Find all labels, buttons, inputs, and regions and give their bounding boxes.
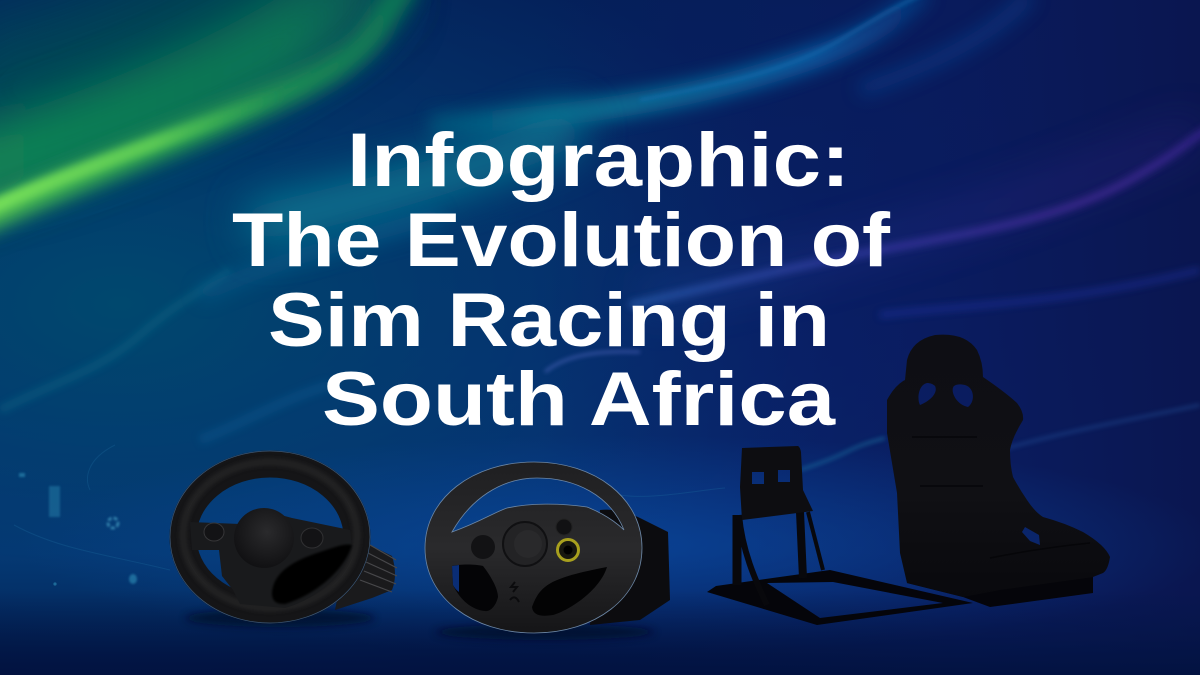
wheel one rim [183,464,357,610]
wheel one hub [234,508,294,568]
wheel two centre [503,522,547,566]
title: The Evolution of [232,198,891,283]
title: South Africa [322,357,836,442]
decorative HUD marks [19,473,137,586]
rig uprights [737,512,823,605]
icon: racing wheel two [425,462,670,640]
title: Sim Racing in [268,278,830,363]
rig base frame [707,570,973,625]
wheel two buttons [471,519,578,560]
seat seams [912,437,1090,558]
wheel one column [335,535,397,610]
wheel one spokes [190,510,352,608]
seat base [907,570,1093,607]
wheel two mount [590,510,670,625]
wheel two body [425,462,642,633]
title [232,118,891,442]
title: Infographic: [347,118,850,203]
icon: racing seat [887,335,1110,607]
wheel one cavity [272,544,352,604]
rig wheel plate [740,446,813,520]
wheel one buttons [204,523,323,548]
wheel two openings [452,564,498,611]
icon: racing wheel one [170,451,397,627]
seat shell [887,335,1110,597]
icon: wheel stand rig [707,446,973,625]
